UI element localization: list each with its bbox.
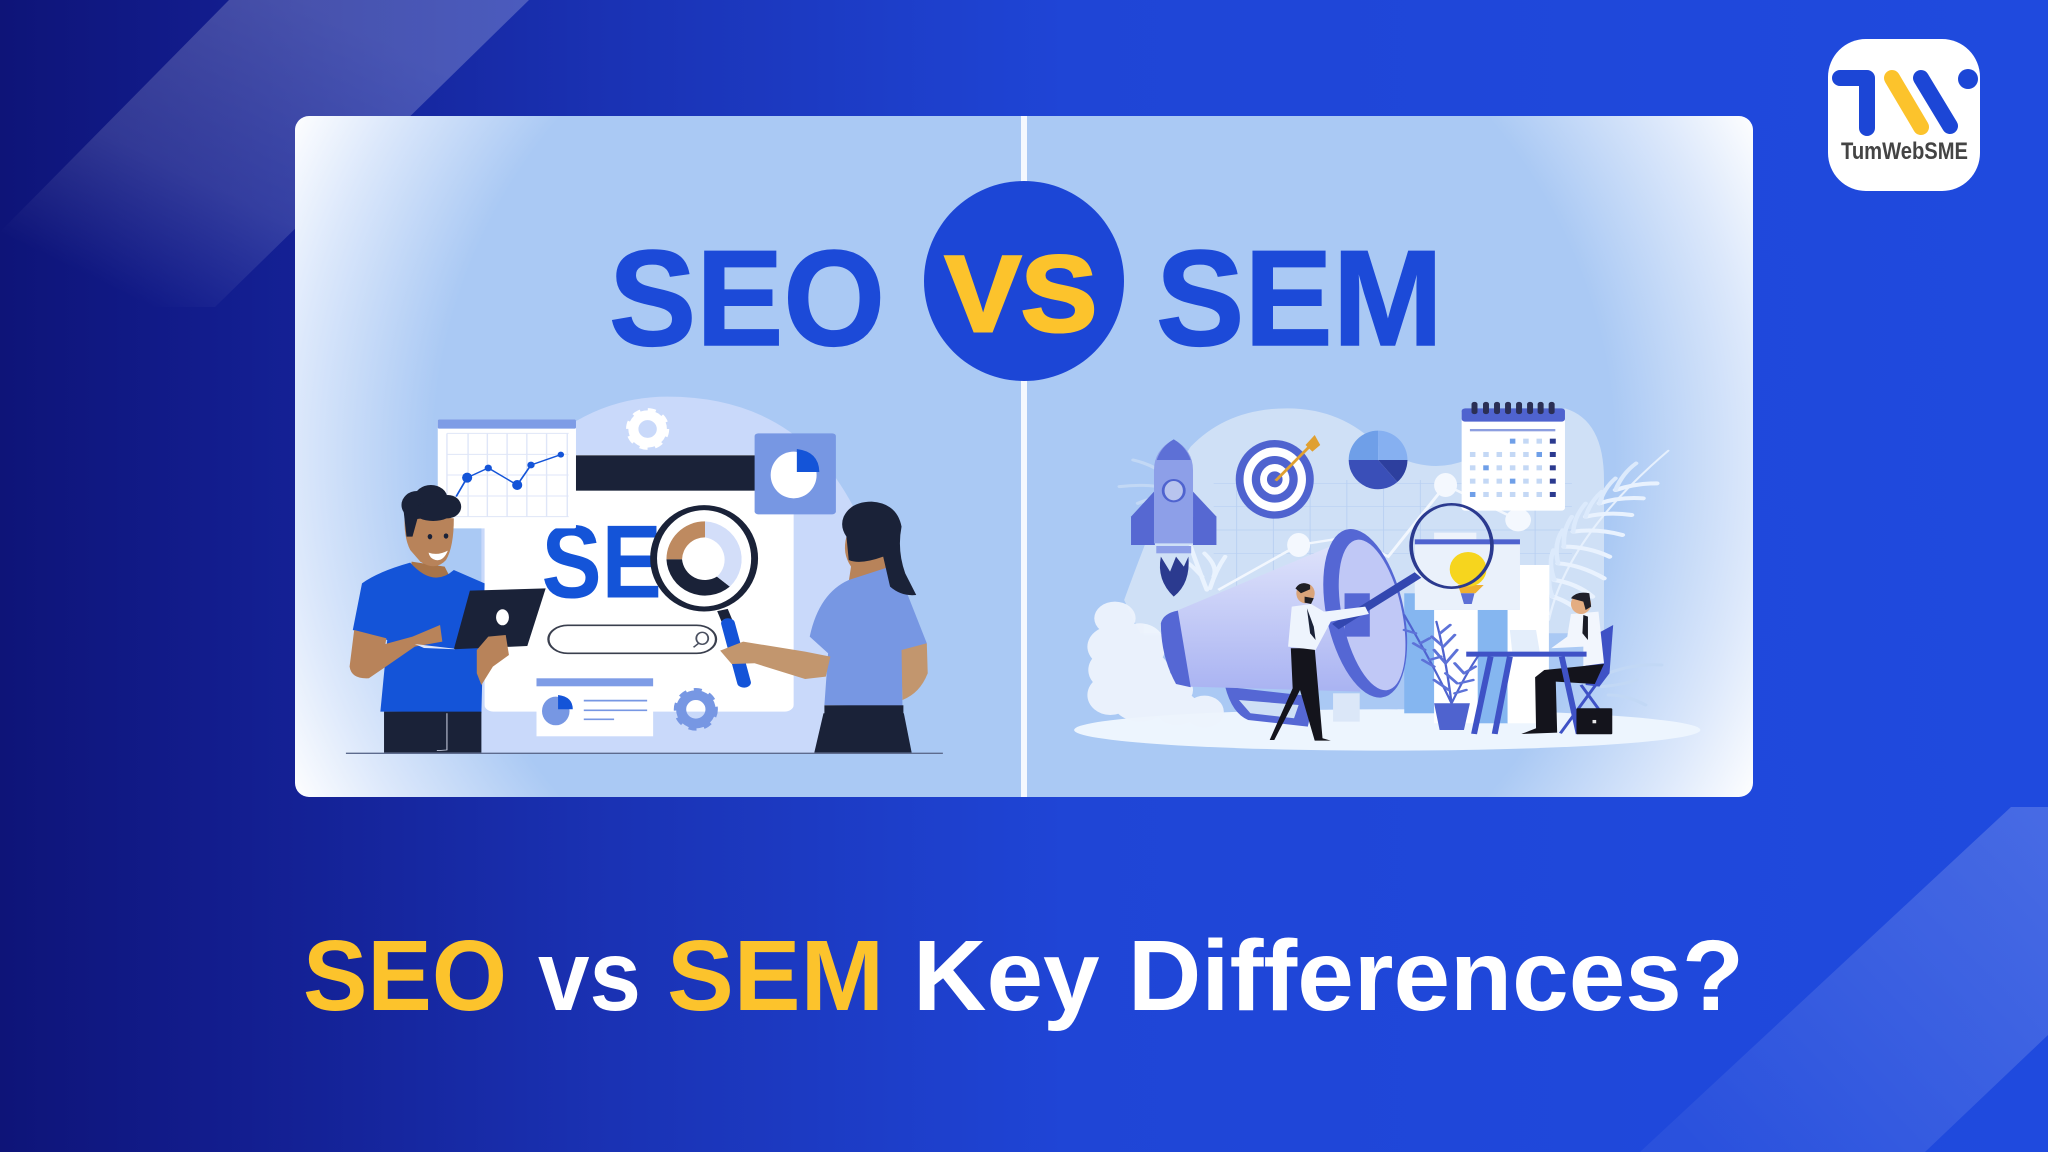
standing man <box>1270 583 1369 741</box>
woman with magnifier <box>720 502 928 753</box>
title <box>303 920 1744 1032</box>
rocket <box>1131 439 1216 597</box>
title: Key Differences? <box>913 920 1744 1032</box>
browser window with light bulb <box>1415 533 1520 610</box>
badge: VS: VS <box>945 233 1097 354</box>
man with laptop <box>350 485 546 753</box>
search page card: SE <box>542 503 662 620</box>
magnifying glass <box>654 508 755 683</box>
magnifier <box>1335 504 1492 627</box>
foliage: fern <box>1120 451 1668 705</box>
rising trend line <box>1218 473 1531 590</box>
title: vs <box>538 920 641 1032</box>
title: SEM <box>667 920 884 1032</box>
potted plant <box>1404 615 1478 730</box>
calendar <box>1462 404 1565 511</box>
logo: TumWebSME <box>1828 39 1980 191</box>
bar columns <box>1259 565 1549 723</box>
ground <box>1074 709 1700 751</box>
title: SEO <box>303 920 507 1032</box>
logo: TumWebSME: TumWebSME <box>1841 138 1968 165</box>
illustration: SEM team <box>1074 404 1700 751</box>
small report card <box>536 678 653 736</box>
pie chart <box>1349 431 1407 489</box>
megaphone <box>1161 525 1420 727</box>
badge: VS <box>924 181 1124 381</box>
icon: white gear <box>628 410 667 448</box>
pie chart tile <box>755 433 836 514</box>
decorative stripe: bottom right <box>1640 807 2048 1152</box>
target <box>1236 435 1320 519</box>
heading: SEM: SEM <box>1156 222 1443 374</box>
seated man at desk <box>1466 593 1613 734</box>
illustration: SEO team <box>346 397 943 753</box>
line chart window <box>438 419 576 528</box>
search page card <box>485 455 794 712</box>
decorative stripe: top left <box>0 0 529 307</box>
panel: comparison card <box>295 116 1753 797</box>
clouds <box>1087 602 1224 728</box>
heading: SEO: SEO <box>609 222 885 374</box>
icon: blue gear <box>676 690 716 728</box>
